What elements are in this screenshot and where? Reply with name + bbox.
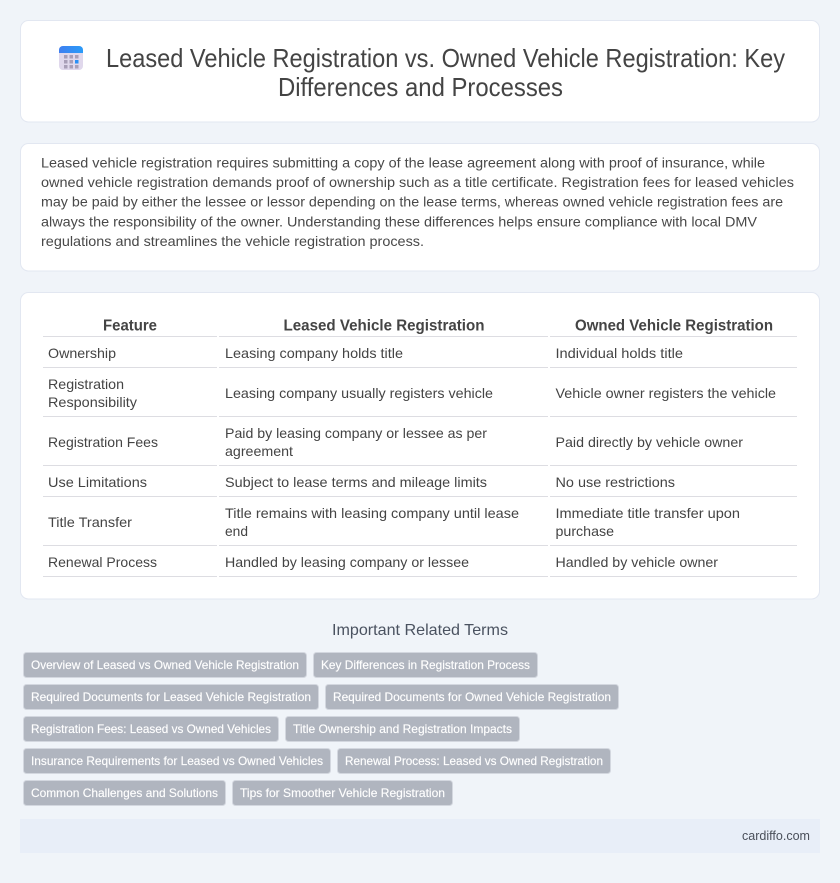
row: ownership: Ownership [48,345,116,361]
row: use limitations [48,474,675,490]
related terms tags [24,652,618,806]
text block: summary: regulations and streamlines the vehicle registration process. [41,233,424,249]
text block: summary: always the responsibility of the owner. Understanding these differences helps ensure compliance with local DMV [41,213,758,229]
tag: Renewal Process: Leased vs Owned Registration [345,754,603,768]
icon: calendar [59,46,83,70]
footer [20,819,820,853]
tag [24,652,306,678]
row: registration fees: Paid by leasing company or lessee as per [225,425,487,441]
row: renewal process: Handled by vehicle owner [556,554,718,570]
row: ownership [48,345,683,361]
tag [338,748,610,774]
row: use limitations: No use restrictions [556,474,675,490]
row: ownership: Leasing company holds title [225,345,403,361]
row: registration fees: Paid directly by vehicle owner [556,434,743,450]
text block: summary: Leased vehicle registration requires submitting a copy of the lease agreement along with proof of insurance, while [41,154,765,170]
title [106,45,785,102]
tag [314,652,538,678]
row: registration fees [48,425,743,459]
tag [24,748,330,774]
row: title transfer: purchase [556,523,614,539]
text block: summary: owned vehicle registration demands proof of ownership such as a title certificate. Registration fees for leased vehicles [41,174,794,190]
table header row: Leased Vehicle Registration [284,318,484,334]
tag: Key Differences in Registration Process [321,658,530,672]
panel: comparison table [20,292,820,599]
footer: cardiffo.com [742,828,810,843]
tag: Insurance Requirements for Leased vs Owned Vehicles [31,754,323,768]
row: renewal process: Handled by leasing company or lessee [225,554,469,570]
table header row: Feature [103,318,157,334]
tag [24,716,278,742]
tag [232,780,452,806]
tag [286,716,520,742]
row: registration fees: Registration Fees [48,434,158,450]
row: title transfer: Title remains with leasing company until lease [225,505,519,521]
tag [326,684,618,710]
row: use limitations: Use Limitations [48,474,147,490]
row: use limitations: Subject to lease terms and mileage limits [225,474,487,490]
row: registration responsibility: Responsibility [48,394,137,410]
row: renewal process: Renewal Process [48,554,157,570]
row: registration fees: agreement [225,443,293,459]
title: Differences and Processes [278,74,563,102]
tag: Required Documents for Leased Vehicle Registration [31,690,311,704]
tag [24,684,318,710]
tag: Registration Fees: Leased vs Owned Vehicles [31,722,271,736]
row: registration responsibility: Vehicle owner registers the vehicle [556,385,776,401]
text block: summary: may be paid by either the lessee or lessor depending on the lease terms, whereas owned vehicle registration fees are [41,194,783,210]
row: renewal process [48,554,718,570]
panel: summary paragraph [20,144,820,271]
text block: summary [41,154,794,249]
header panel [20,20,820,122]
row: title transfer [48,505,740,539]
table header row [103,318,773,334]
tag: Tips for Smoother Vehicle Registration [240,786,445,800]
title: Leased Vehicle Registration vs. Owned Vehicle Registration: Key [106,45,785,73]
tag [24,780,226,806]
row: registration responsibility: Registration [48,376,124,392]
tag: Common Challenges and Solutions [31,786,218,800]
heading: important related terms: Important Related Terms [332,622,508,639]
table header row: Owned Vehicle Registration [575,318,773,334]
tag: Overview of Leased vs Owned Vehicle Registration [31,658,299,672]
tag: Required Documents for Owned Vehicle Registration [333,690,611,704]
row: ownership: Individual holds title [556,345,683,361]
row: title transfer: Immediate title transfer upon [556,505,740,521]
row: registration responsibility [48,376,776,410]
row: title transfer: end [225,523,248,539]
tag: Title Ownership and Registration Impacts [293,722,512,736]
row: registration responsibility: Leasing company usually registers vehicle [225,385,493,401]
row: title transfer: Title Transfer [48,514,132,530]
